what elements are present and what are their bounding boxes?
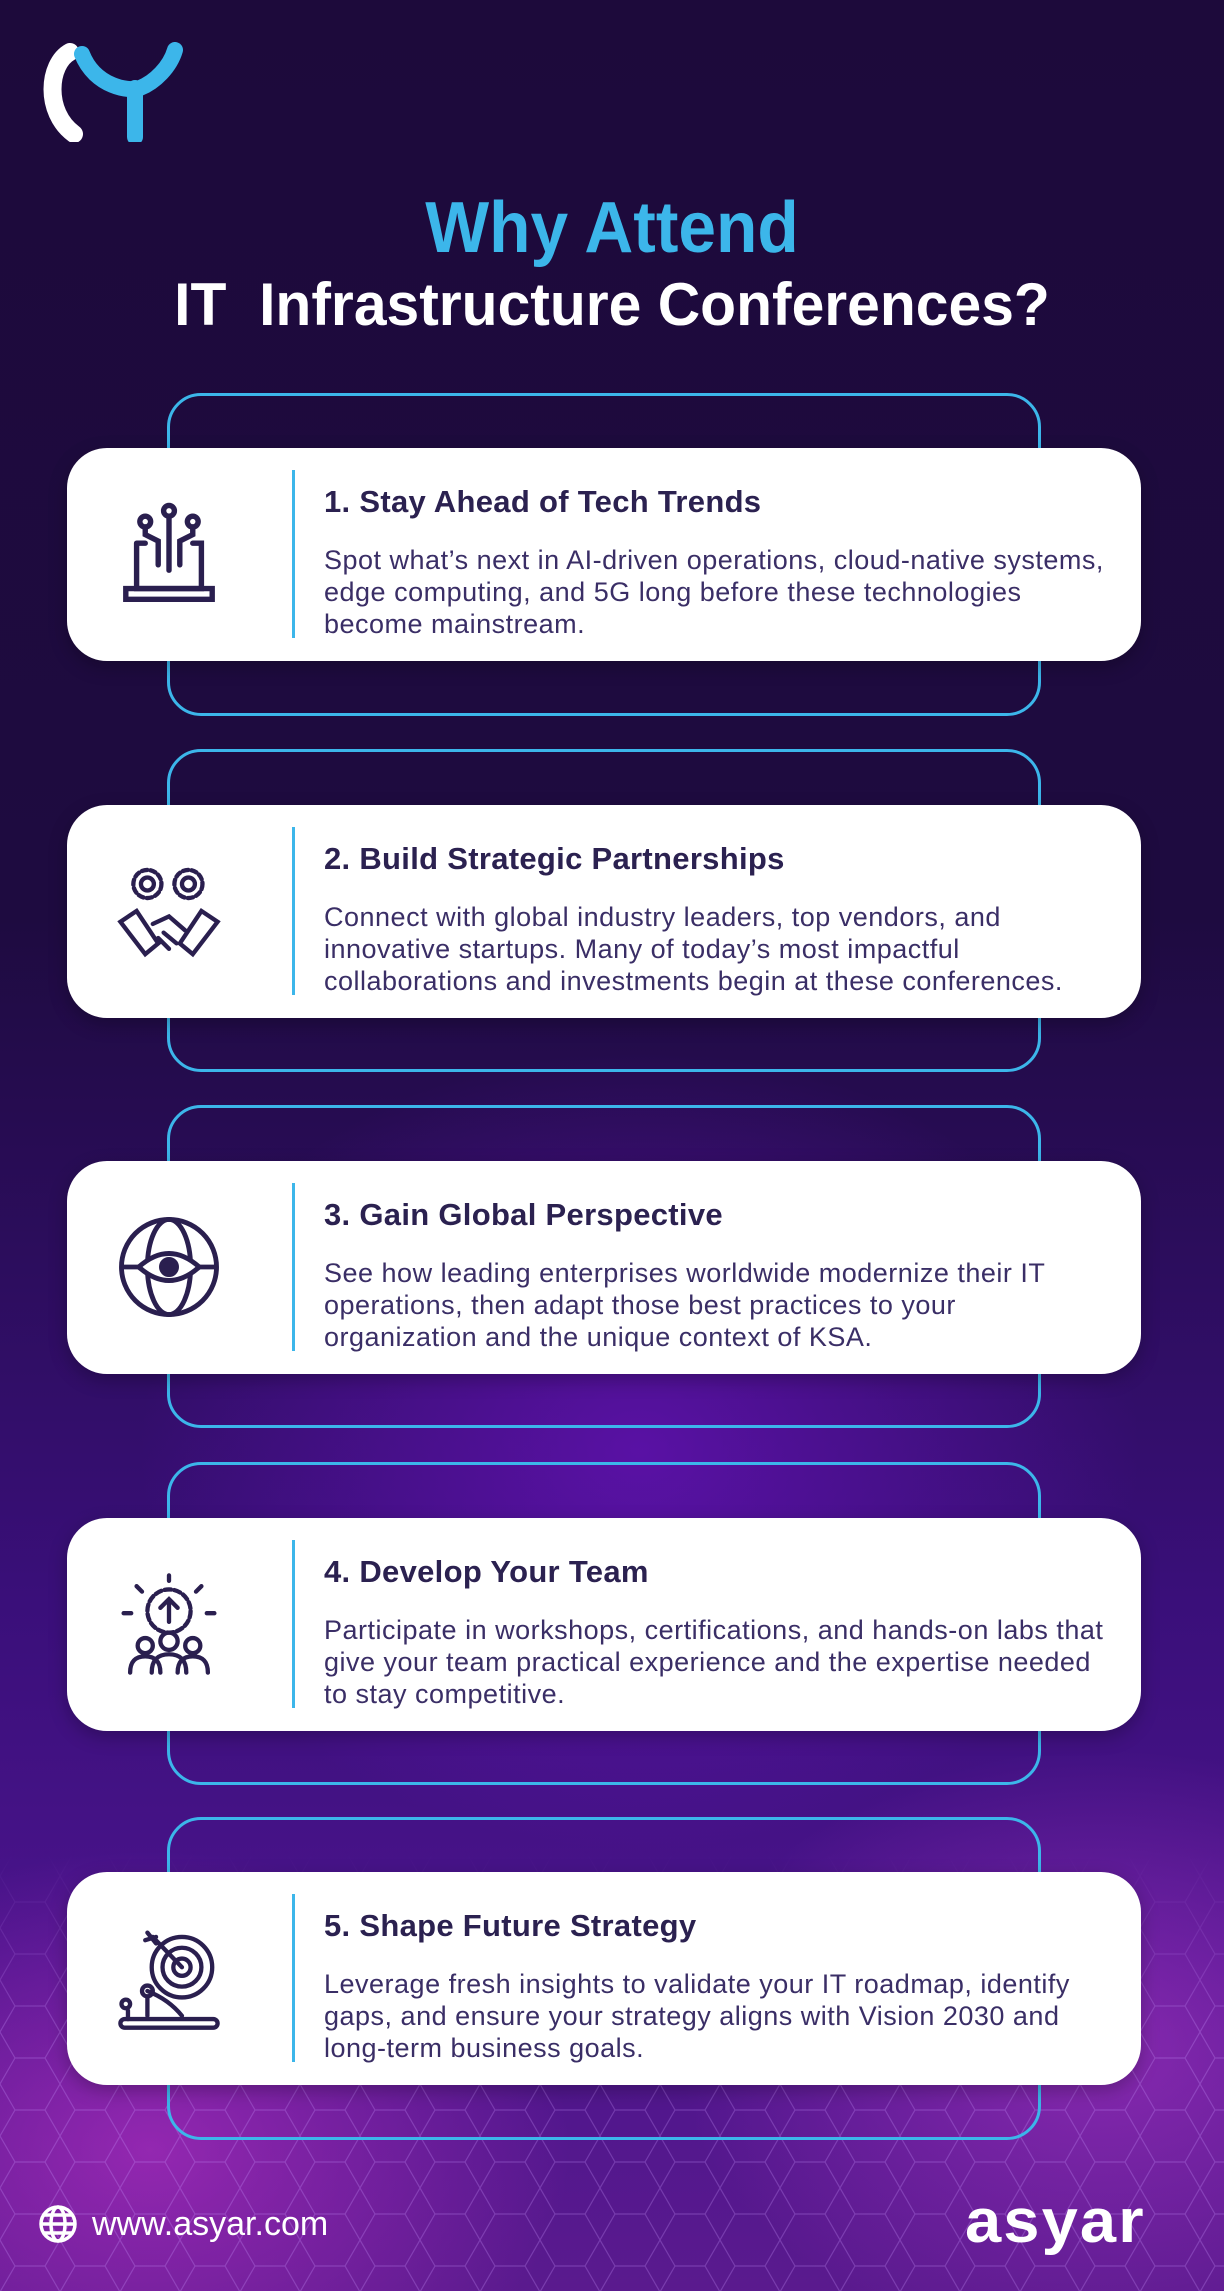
text: organization and the unique context of KSA.	[324, 1322, 872, 1352]
icon: team gear	[122, 1573, 216, 1675]
card 5	[67, 1872, 1141, 2085]
text	[324, 1615, 1103, 1709]
logo top-left	[44, 42, 183, 142]
icon: target	[118, 1930, 220, 2030]
text: long-term business goals.	[324, 2033, 644, 2063]
text: edge computing, and 5G long before these technologies	[324, 577, 1021, 607]
text: innovative startups. Many of today’s most impactful	[324, 934, 960, 964]
text: collaborations and investments begin at these conferences.	[324, 966, 1063, 996]
text	[324, 902, 1063, 996]
text: See how leading enterprises worldwide modernize their IT	[324, 1258, 1045, 1288]
icon: gears handshake	[117, 868, 221, 958]
text: Spot what’s next in AI-driven operations, cloud-native systems,	[324, 545, 1104, 575]
footer website: www.asyar.com	[92, 2204, 328, 2242]
title	[174, 188, 1050, 338]
heading: 5. Shape Future Strategy	[324, 1908, 696, 1943]
text: give your team practical experience and the expertise needed	[324, 1647, 1091, 1677]
card 2	[67, 805, 1141, 1018]
text	[324, 1969, 1070, 2063]
text: become mainstream.	[324, 609, 585, 639]
hex mesh background	[0, 1894, 1224, 2291]
text: operations, then adapt those best practices to your	[324, 1290, 956, 1320]
heading: 4. Develop Your Team	[324, 1554, 649, 1589]
text: Leverage fresh insights to validate your IT roadmap, identify	[324, 1969, 1070, 1999]
footer logo asyar: asyar	[965, 2187, 1146, 2256]
text	[324, 1258, 1045, 1352]
card 3	[67, 1161, 1141, 1374]
icon: globe	[39, 2205, 77, 2243]
text: Connect with global industry leaders, top vendors, and	[324, 902, 1001, 932]
heading: 2. Build Strategic Partnerships	[324, 841, 785, 876]
text: to stay competitive.	[324, 1679, 565, 1709]
icon: laptop circuit	[123, 502, 215, 602]
heading: 3. Gain Global Perspective	[324, 1197, 723, 1232]
card 1	[67, 448, 1141, 661]
title: IT Infrastructure Conferences?	[174, 271, 1050, 338]
text: Participate in workshops, certifications, and hands-on labs that	[324, 1615, 1103, 1645]
card 4	[67, 1518, 1141, 1731]
text: gaps, and ensure your strategy aligns with Vision 2030 and	[324, 2001, 1059, 2031]
text	[324, 545, 1104, 639]
heading: 1. Stay Ahead of Tech Trends	[324, 484, 761, 519]
title: Why Attend	[425, 188, 799, 268]
icon: globe eye	[119, 1217, 219, 1317]
